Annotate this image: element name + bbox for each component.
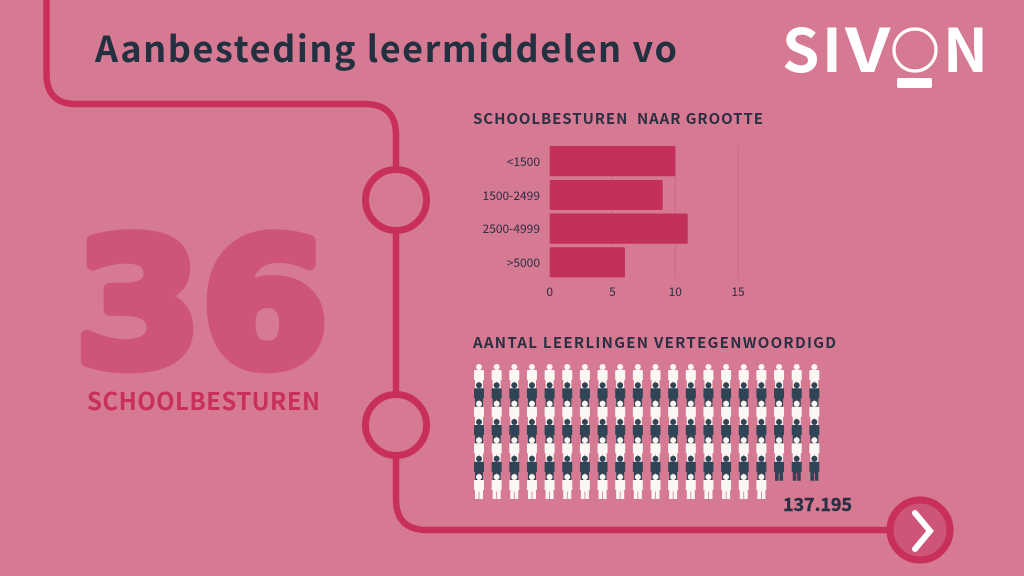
logo: SIVON: I — [822, 3, 842, 90]
logo: SIVON: S — [782, 3, 819, 90]
label: schoolbesturen: SCHOOLBESTUREN — [87, 382, 320, 417]
timeline node: top circle — [366, 170, 426, 230]
category labels: 1500-2499 — [483, 187, 540, 204]
bar chart: schoolbesturen naar grootte — [483, 146, 745, 300]
heading: schoolbesturen naar grootte: SCHOOLBESTUREN NAAR GROOTTE — [473, 108, 763, 129]
big number: 36: 36 — [75, 204, 328, 407]
grid lines — [612, 146, 738, 278]
heading: aantal leerlingen vertegenwoordigd: AANTAL LEERLINGEN VERTEGENWOORDIGD — [472, 332, 836, 353]
category labels — [483, 153, 540, 271]
axis labels: 5 — [609, 283, 616, 300]
category labels: 2500-4999 — [483, 220, 540, 237]
axis labels: 10 — [669, 283, 682, 300]
timeline connector line — [46, 0, 888, 530]
title: Aanbesteding leermiddelen vo — [94, 21, 677, 73]
timeline node: bottom circle — [366, 394, 426, 456]
axis labels: 15 — [731, 283, 745, 300]
logo: SIVON — [782, 3, 988, 90]
pictogram: people — [474, 364, 819, 499]
value: 137.195: 137.195 — [783, 491, 852, 517]
axis labels: 0 — [546, 283, 553, 300]
next button arrow — [890, 500, 950, 560]
axis labels — [546, 283, 745, 300]
bars — [550, 146, 688, 277]
category labels: >5000 — [507, 254, 540, 271]
logo: SIVON: V — [844, 3, 891, 90]
logo: SIVON: N — [943, 3, 988, 90]
category labels: <1500 — [507, 153, 540, 170]
